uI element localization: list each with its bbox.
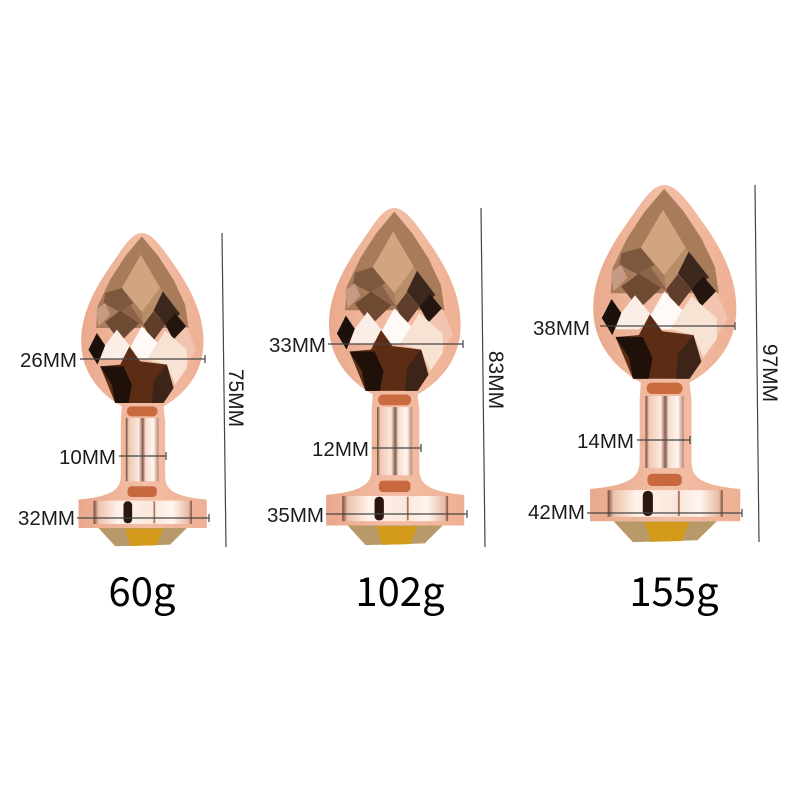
weight label: medium: 102g — [355, 560, 445, 618]
medium size measurements: 12MM — [312, 438, 369, 461]
weight label: large: 155g — [629, 560, 719, 618]
small size measurements: 26MM — [20, 349, 77, 372]
small size measurements: 32MM — [18, 507, 75, 530]
weight label: small: 60g — [109, 560, 175, 618]
small size measurements: 10MM — [59, 446, 116, 469]
large size measurements: 38MM — [533, 317, 590, 340]
large size measurements: 97MM — [758, 344, 781, 402]
product illustration: medium — [326, 208, 464, 545]
large size measurements: 42MM — [528, 501, 585, 524]
medium size measurements — [267, 208, 507, 547]
product illustration: large — [590, 185, 740, 542]
large size measurements — [528, 185, 781, 542]
medium size measurements: 83MM — [484, 351, 507, 409]
product illustration: small — [79, 233, 207, 546]
small size measurements — [18, 233, 247, 547]
medium size measurements: 33MM — [269, 334, 326, 357]
small size measurements: 75MM — [224, 369, 247, 427]
large size measurements: 14MM — [577, 430, 634, 453]
medium size measurements: 35MM — [267, 504, 324, 527]
